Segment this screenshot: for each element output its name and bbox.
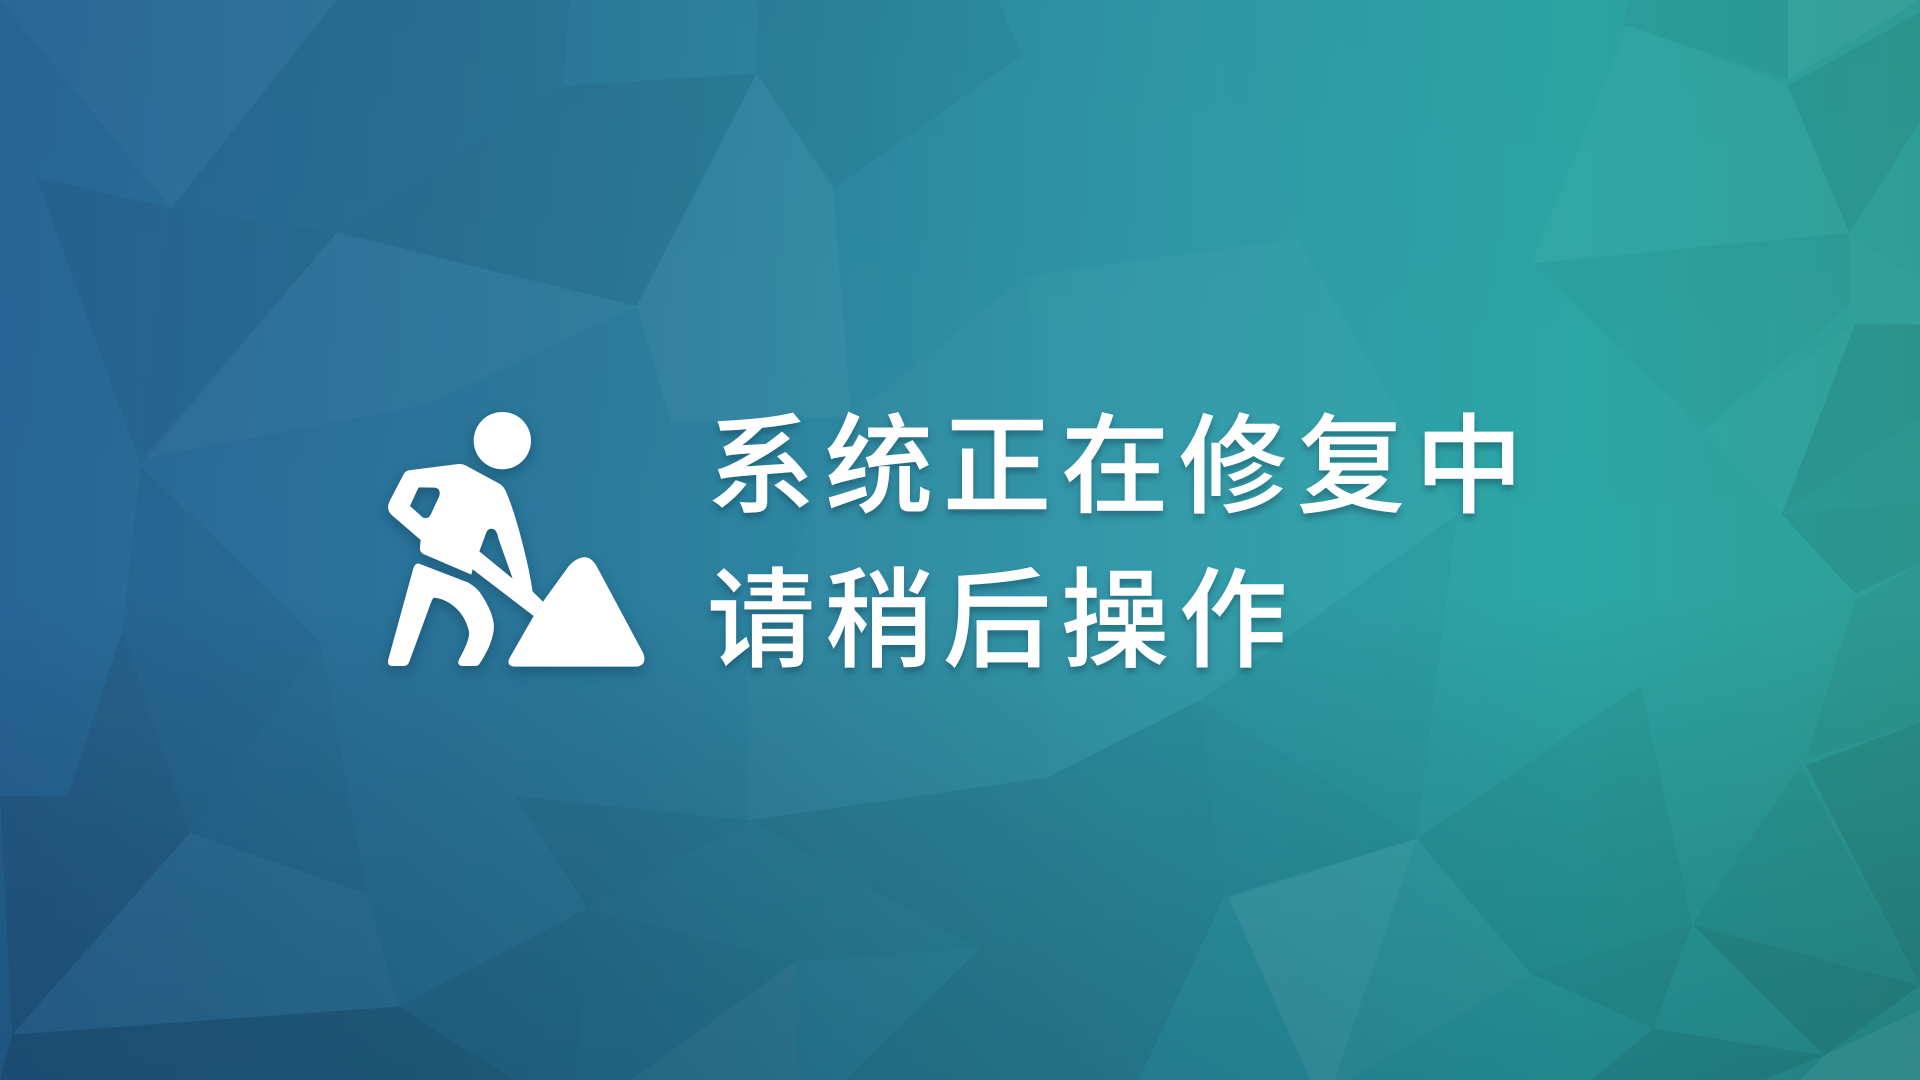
icon: construction worker with shovel [385, 412, 648, 676]
icon: worker legs [388, 563, 494, 666]
heading line 2: 请稍后操作 [707, 560, 1297, 681]
icon: worker torso and shovel handle [388, 464, 543, 616]
icon: worker head [474, 412, 531, 469]
icon: dirt pile [508, 557, 644, 667]
heading line 1: 系统正在修复中 [707, 406, 1533, 527]
